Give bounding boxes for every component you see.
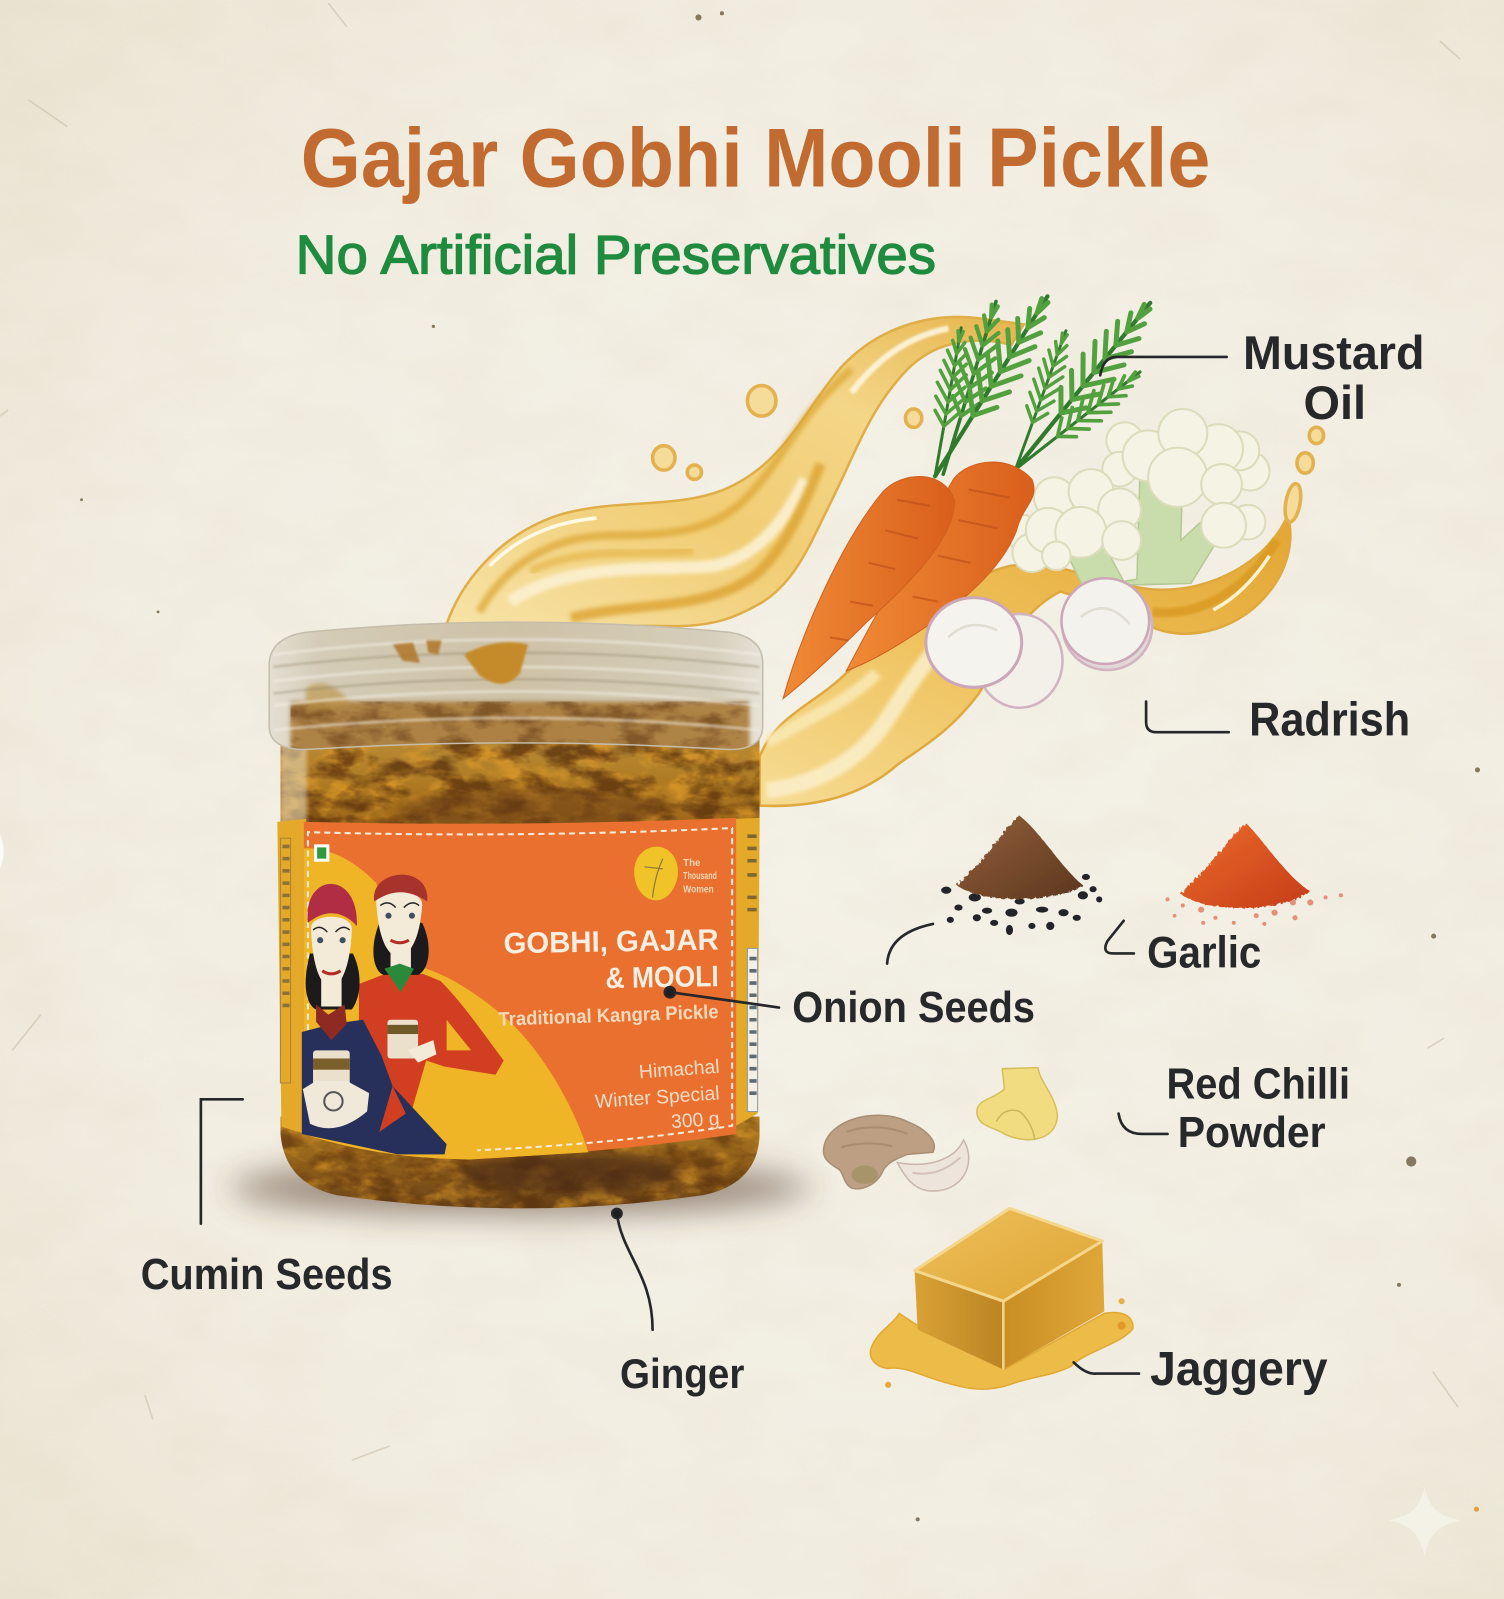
illustration: ginger root <box>823 1115 934 1189</box>
label: yellow side strips <box>277 818 760 1134</box>
leader: garlic <box>1105 921 1134 953</box>
label: mustard oil <box>1243 327 1424 429</box>
label: variety and weight <box>594 1056 720 1133</box>
label: ginger: Ginger <box>620 1350 744 1397</box>
label: radish: Radrish <box>1249 693 1410 745</box>
leader: red chilli <box>1119 1114 1168 1134</box>
label: brand logo: Thousand <box>683 871 717 882</box>
illustration: jaggery block <box>870 1208 1133 1389</box>
leader: jaggery <box>1074 1362 1139 1374</box>
leader: cumin <box>201 1099 243 1224</box>
illustration: jar shadow <box>229 1161 811 1215</box>
pickle jar <box>269 622 763 1219</box>
leader lines <box>201 357 1229 1374</box>
illustration: radish slices <box>926 578 1152 708</box>
oil droplets <box>653 386 1324 523</box>
illustration: upper oil swirl <box>447 317 1024 626</box>
leader: mustard oil <box>1100 357 1227 375</box>
title: Gajar Gobhi Mooli Pickle <box>301 111 1210 205</box>
label: green veg mark <box>314 844 329 862</box>
label: garlic: Garlic <box>1147 927 1261 978</box>
illustration: onion seeds and brown powder <box>941 816 1102 935</box>
illustration: red chilli powder <box>1165 823 1343 926</box>
leader: onion seeds to jar <box>665 987 779 1008</box>
jar lid <box>269 622 763 753</box>
leader: seeds <box>887 924 933 964</box>
label: onion seeds: Onion Seeds <box>792 983 1035 1032</box>
label: product name: GOBHI, GAJAR <box>503 924 719 960</box>
illustration: cauliflower <box>1005 409 1269 586</box>
label: variety and weight: Himachal <box>638 1056 720 1083</box>
label: jaggery: Jaggery <box>1150 1343 1328 1396</box>
label: orange panel <box>304 818 736 1159</box>
label: descriptor: Traditional Kangra Pickle <box>498 1001 719 1031</box>
watermark sparkle <box>1389 1487 1460 1556</box>
label: product name <box>503 924 719 995</box>
illustration: carrots <box>783 462 1034 699</box>
label: woman in red <box>359 875 504 1117</box>
illustration: carrot greens <box>918 286 1166 487</box>
leader: ginger <box>612 1209 653 1330</box>
illustration: peeled ginger chunk <box>977 1068 1057 1140</box>
label: cumin seeds: Cumin Seeds <box>141 1250 393 1299</box>
label: mustard oil: Oil <box>1303 377 1366 429</box>
leader: radish <box>1146 702 1229 732</box>
label: woman in navy <box>302 884 447 1154</box>
jar body with pickle <box>280 739 760 1219</box>
label: product name: & MOOLI <box>605 960 719 995</box>
label: red chilli powder <box>1166 1059 1350 1157</box>
label: brand logo: The <box>683 858 701 869</box>
label: yellow swoosh <box>304 848 588 1159</box>
label: brand logo <box>634 847 717 900</box>
label: small jars held <box>303 1020 436 1128</box>
label: red chilli powder: Red Chilli <box>1166 1059 1350 1108</box>
label: variety and weight: 300 g <box>670 1108 720 1133</box>
label: mustard oil: Mustard <box>1243 327 1424 379</box>
label: variety and weight: Winter Special <box>594 1082 720 1113</box>
illustration: lower oil swirl <box>760 515 1290 806</box>
label: dashed stitching <box>308 828 732 1150</box>
label: red chilli powder: Powder <box>1178 1108 1326 1157</box>
label: brand logo: Women <box>683 884 714 895</box>
illustration: garlic clove <box>897 1140 969 1191</box>
subtitle: No Artificial Preservatives <box>296 223 936 285</box>
